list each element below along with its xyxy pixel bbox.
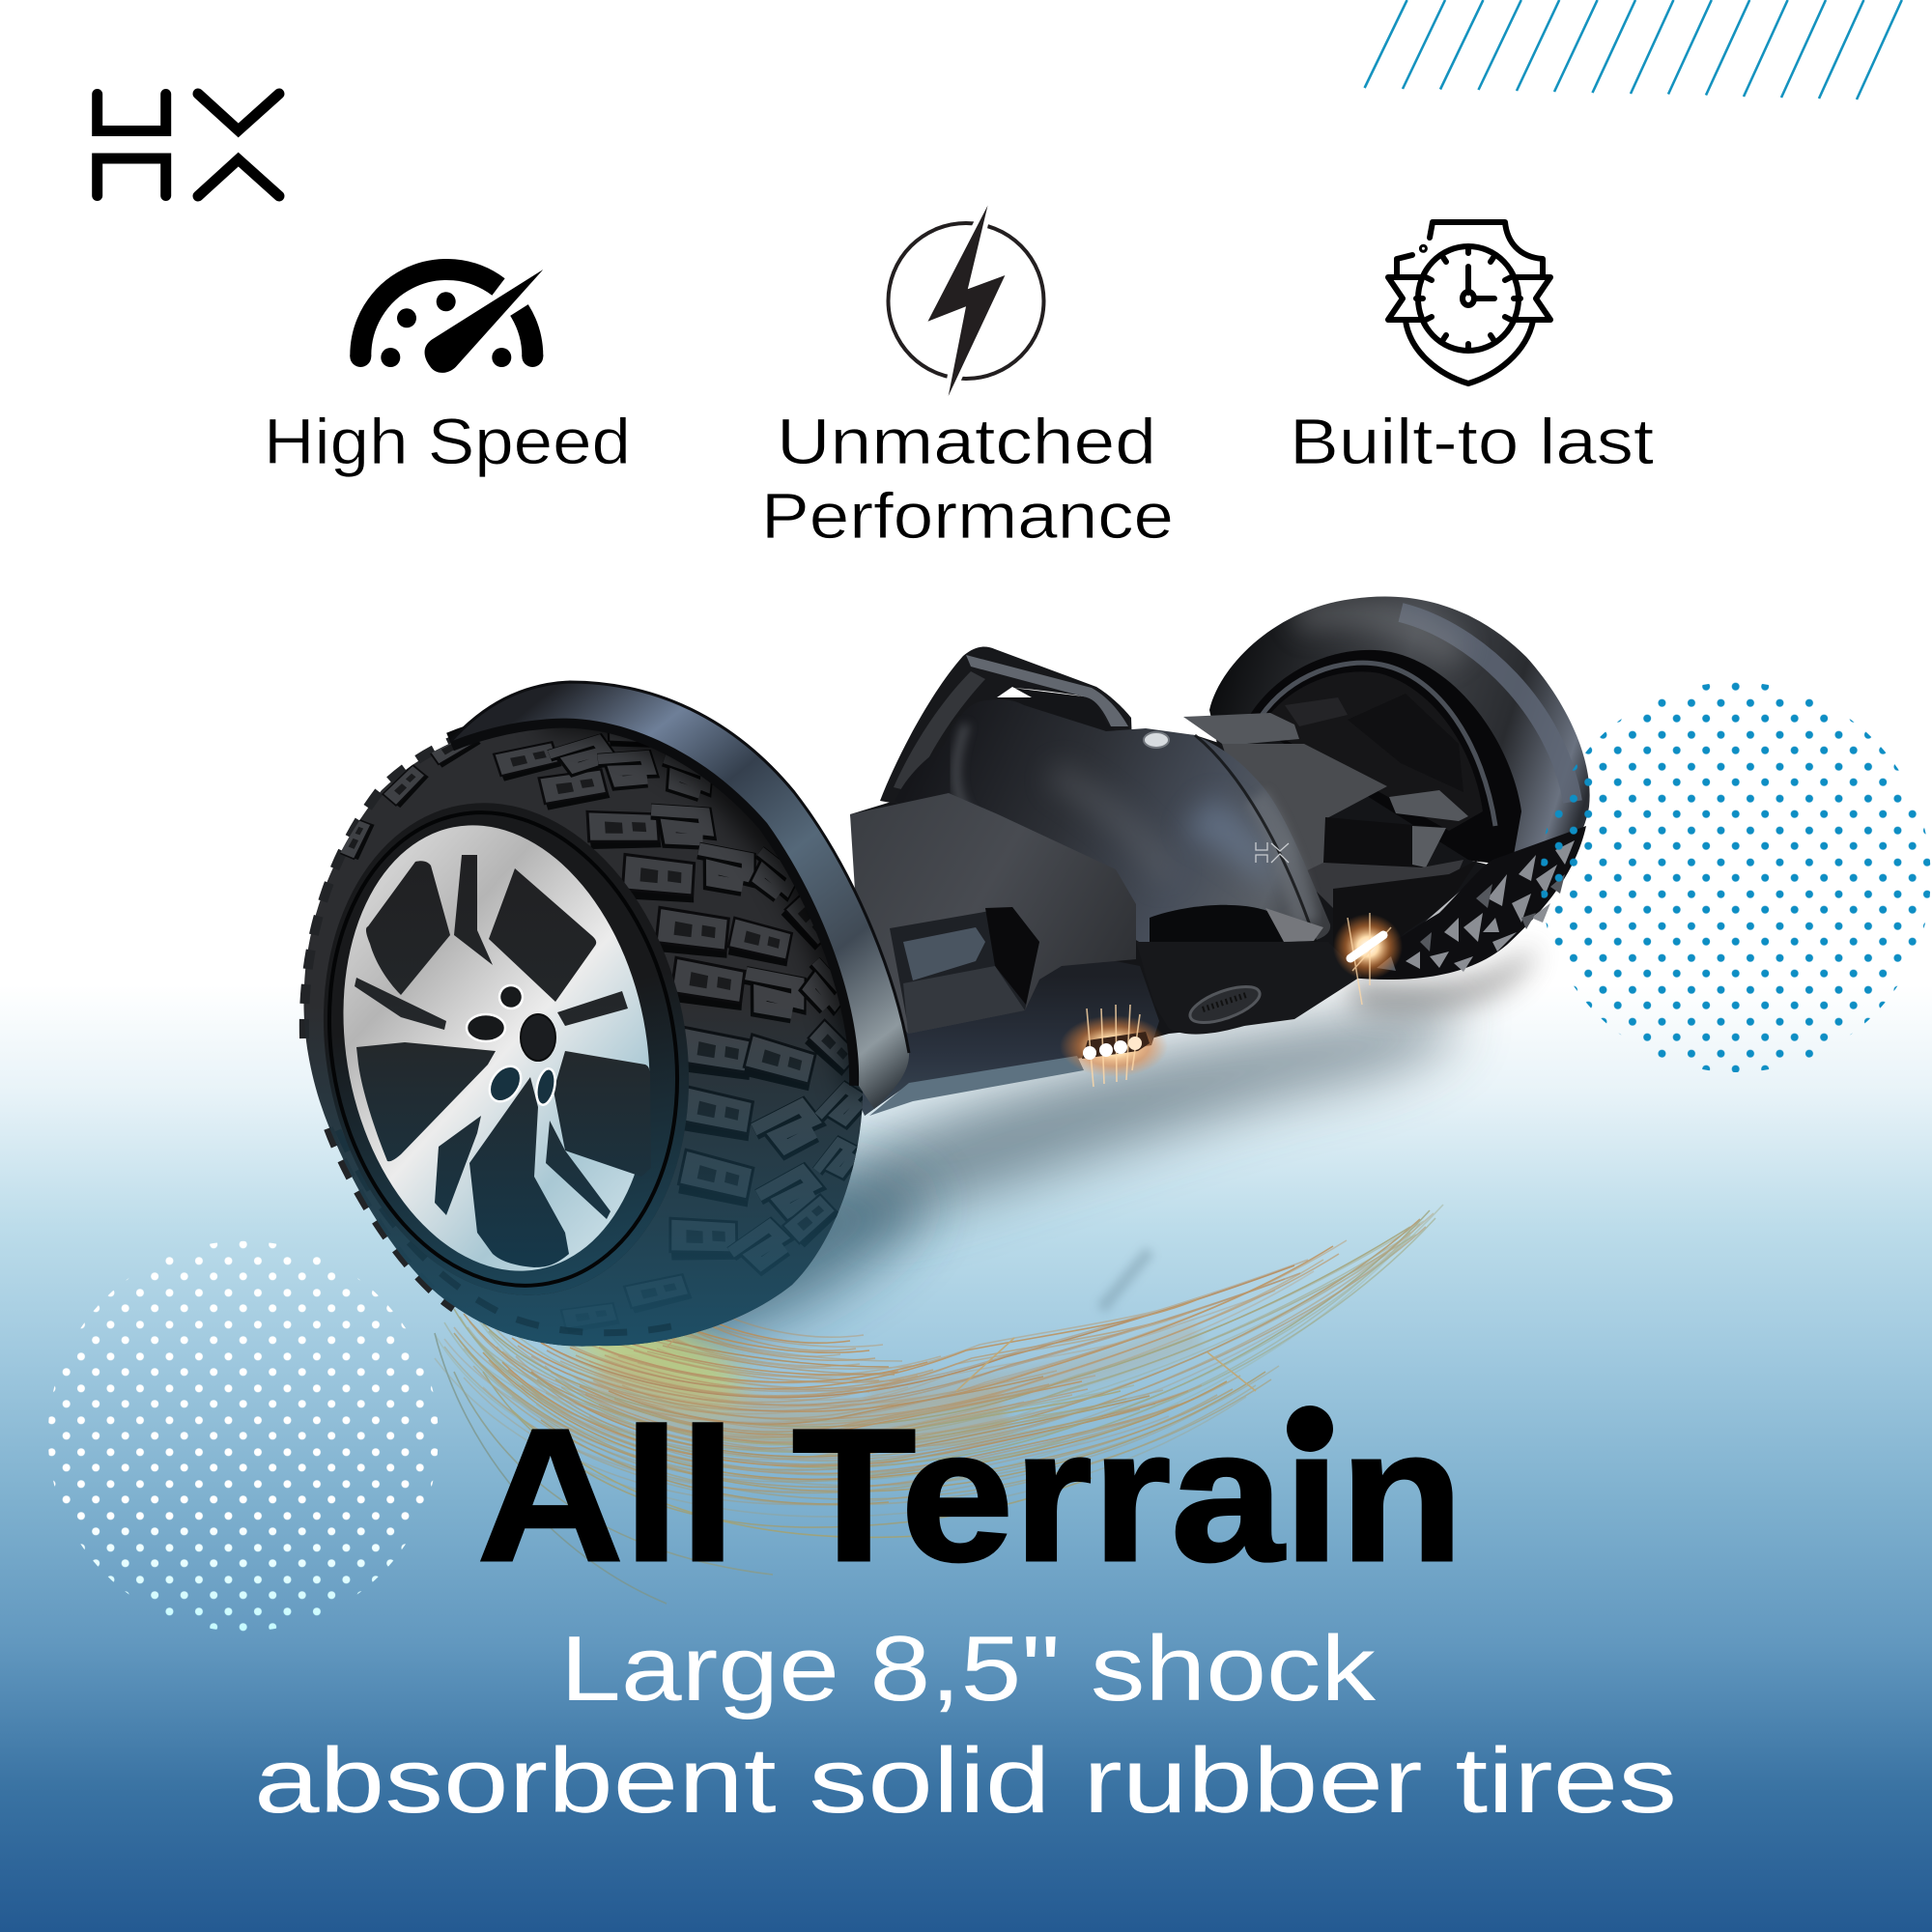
power button	[1144, 732, 1169, 748]
outer knobs	[304, 724, 502, 1308]
label: Unmatched Performance: Unmatched	[777, 406, 1156, 478]
decorative diagonal stripes	[1365, 0, 1902, 99]
label: High Speed: High Speed	[264, 406, 631, 478]
feature: unmatched performance	[761, 206, 1174, 553]
rear wheel	[1209, 596, 1590, 866]
gap under the handle	[997, 687, 1032, 697]
sidewall	[282, 771, 730, 1327]
subheading: Large 8,5" shock	[560, 1617, 1377, 1720]
platform and battery box	[1183, 713, 1478, 966]
glossy dome	[895, 699, 1330, 946]
front LED bar	[1060, 1005, 1168, 1087]
subheading	[254, 1617, 1677, 1833]
alloy rim	[306, 799, 687, 1297]
feature: high speed	[264, 270, 631, 478]
rear fender disc	[1209, 596, 1590, 865]
foot pedal	[1186, 980, 1264, 1030]
rear LED bar	[1333, 913, 1403, 1005]
shadow under the fender	[541, 710, 863, 1092]
handle	[880, 647, 1132, 807]
base plate	[850, 956, 1159, 1116]
hoverboard	[282, 596, 1590, 1352]
feature: built to last	[1290, 222, 1654, 478]
fibre swoosh under the tyre	[435, 1205, 1443, 1604]
body backing	[850, 688, 1507, 1116]
icon: speedometer	[350, 270, 543, 373]
tyre	[290, 710, 879, 1352]
rear tyre	[1348, 826, 1586, 980]
blue tint towards the floor	[309, 1036, 863, 1347]
small HX mark	[1256, 842, 1289, 863]
grey side block	[850, 793, 1136, 1034]
HX logo	[98, 94, 279, 196]
foot pad recess	[890, 907, 1039, 1034]
lower dark chassis	[1136, 942, 1362, 1035]
icon: lightning bolt	[889, 206, 1043, 396]
icon: clock shield	[1388, 222, 1550, 384]
subheading: absorbent solid rubber tires	[254, 1729, 1677, 1833]
ground shadow	[618, 947, 1536, 1352]
knobbly shoulder	[338, 1130, 676, 1333]
label: Built-to last: Built-to last	[1290, 406, 1654, 478]
rim bolts	[467, 981, 558, 1107]
label: Unmatched Performance: Performance	[761, 480, 1174, 553]
white halftone dot circle	[39, 1236, 444, 1637]
wheel hub	[521, 1014, 555, 1061]
label: Unmatched Performance	[761, 406, 1174, 553]
blue halftone dot circle	[1541, 682, 1931, 1072]
rim windows	[355, 855, 651, 1267]
fender	[450, 682, 909, 1109]
dome highlight	[956, 724, 1323, 947]
tread lugs	[340, 733, 863, 1283]
headline: All Terrain: All Terrain	[477, 1390, 1463, 1601]
front wheel	[282, 682, 909, 1352]
